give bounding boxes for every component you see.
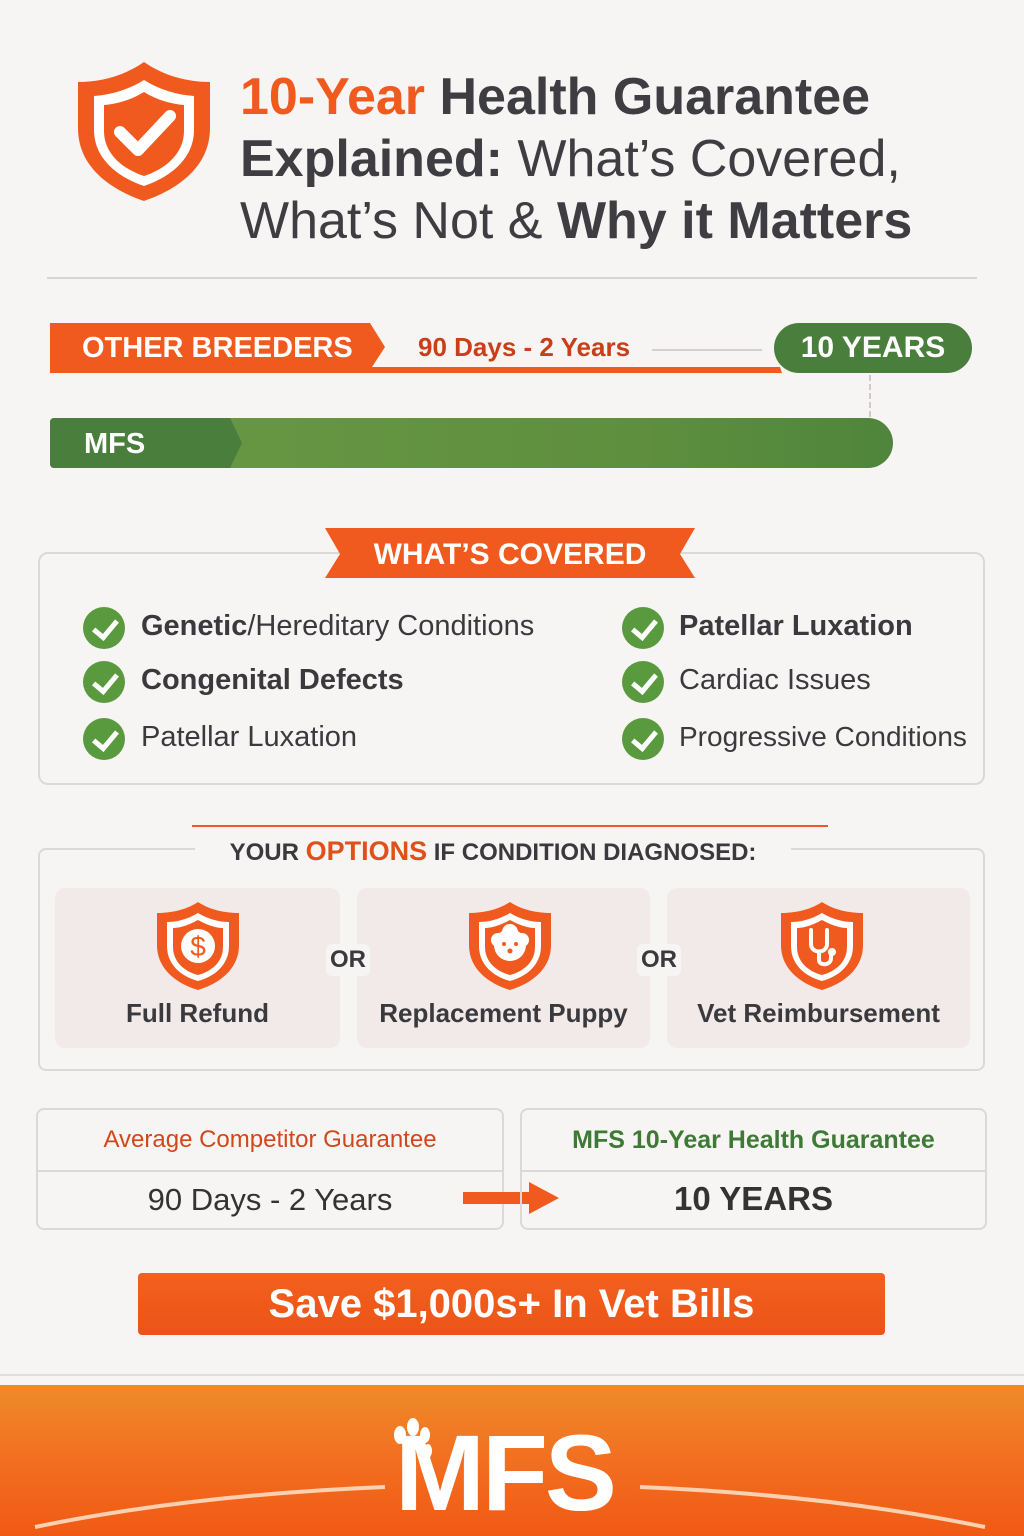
timeline comparison: OTHER BREEDERS [82,332,353,364]
title: Explained: What’s Covered, [240,130,901,188]
panel: what's covered: Cardiac Issues [679,664,871,696]
panel: what's covered: Patellar Luxation [141,721,357,753]
text: or 2: OR [641,946,677,973]
other breeders bar [50,323,782,373]
card: replacement puppy [357,888,650,1048]
timeline comparison: 90 Days - 2 Years [418,332,630,362]
footer logo band [0,1385,1024,1536]
card: vet reimbursement: Vet Reimbursement [697,998,940,1028]
card: full refund: Full Refund [126,998,269,1028]
panel: what's covered: Congenital Defects [141,664,404,696]
panel: what's covered: WHAT’S COVERED [374,538,646,571]
10 years pill [774,323,972,373]
MFS bar: MFS [84,428,145,460]
panel: options [38,848,985,1071]
title: What’s Not & Why it Matters [240,192,912,250]
title: 10-Year Health Guarantee [240,68,870,126]
MFS bar [50,418,893,468]
banner [325,528,695,578]
card: vet reimbursement [667,888,970,1048]
text: or 1: OR [330,946,366,973]
card: replacement puppy: Replacement Puppy [379,998,628,1028]
comparison: MFS [520,1108,987,1230]
options heading: YOUR OPTIONS IF CONDITION DIAGNOSED: [230,836,756,866]
footer logo band: MFS [395,1412,614,1533]
panel: what's covered: Patellar Luxation [679,610,913,642]
comparison: MFS: 10 YEARS [674,1180,833,1217]
10 years pill: 10 YEARS [801,331,945,364]
text: or 2 [637,944,681,976]
timeline comparison [50,323,972,468]
title [240,68,912,250]
panel: what's covered [38,552,985,785]
comparison: competitor: 90 Days - 2 Years [148,1182,392,1217]
callout: save [138,1273,885,1335]
card: full refund [55,888,340,1048]
comparison: competitor: Average Competitor Guarantee [103,1126,437,1153]
icon: header shield [78,62,210,201]
comparison: MFS: MFS 10-Year Health Guarantee [572,1126,935,1154]
panel: what's covered: Progressive Conditions [679,721,967,752]
arrow [463,1182,559,1214]
card: full refund: $ [190,931,206,962]
callout: save: Save $1,000s+ In Vet Bills [269,1282,754,1326]
comparison: competitor [36,1108,504,1230]
text: or 1 [326,944,370,976]
panel: what's covered: Genetic/Hereditary Conditions [141,610,534,642]
